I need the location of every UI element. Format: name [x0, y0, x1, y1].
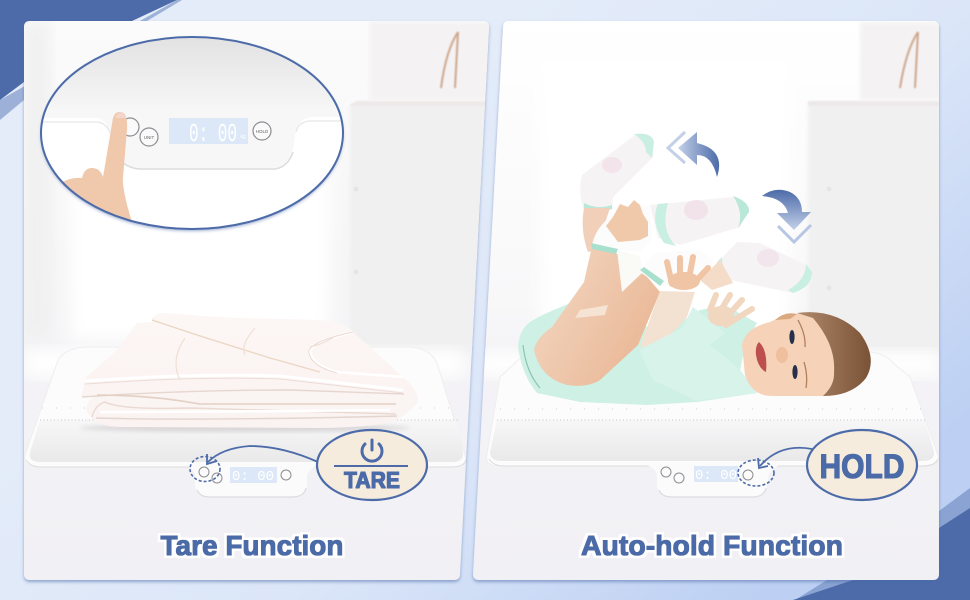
center sock [592, 220, 606, 244]
forearm (translucent) [640, 291, 695, 347]
ghost foot: middle [650, 196, 749, 246]
ghost foot: lower [717, 242, 812, 293]
leg [534, 246, 660, 386]
hold button highlight and arrow [738, 448, 812, 486]
scale display reading: kg [240, 134, 246, 140]
tare callout: TARE [344, 467, 400, 493]
arrow: kick down right [762, 190, 811, 242]
back skin toward lower foot [700, 260, 733, 290]
scale console [188, 466, 314, 498]
panel: tare function [24, 21, 489, 580]
hair [797, 312, 871, 396]
scale display reading [169, 118, 248, 144]
rear leg [583, 208, 610, 252]
magnified view: finger pressing tare button [40, 37, 345, 229]
head [742, 313, 869, 396]
tare button highlight and arrow [190, 446, 318, 482]
tare callout [317, 430, 427, 500]
heading: tare function: Tare Function [160, 530, 344, 561]
icon: power [362, 440, 382, 461]
arrow: kick up left [668, 132, 719, 177]
room furniture [473, 22, 945, 376]
scale console: 0: 00 [695, 468, 737, 484]
heading: auto-hold function: Auto-hold Function [581, 530, 843, 561]
onesie [518, 300, 757, 405]
hands [667, 257, 708, 284]
scale buttons [121, 118, 271, 146]
scale buttons: HOLD [256, 129, 269, 134]
panel: auto-hold function [473, 21, 939, 580]
second foot sock [642, 272, 648, 278]
panel scene: auto-hold room and scale [473, 22, 945, 561]
hold callout: HOLD [820, 448, 904, 486]
eyes [789, 330, 795, 344]
finger and hand [62, 112, 132, 224]
sleeve [639, 307, 757, 401]
baby scale platform [487, 351, 938, 466]
mouth and nose [756, 342, 766, 372]
scale console: 0: 00 [232, 469, 274, 485]
scale display reading: 0: 00 [189, 119, 237, 149]
baby [518, 134, 871, 405]
ghost foot: upper [580, 134, 654, 211]
baby scale platform [25, 347, 466, 467]
folded quilt [80, 313, 418, 432]
hold callout [807, 430, 917, 500]
scale console [642, 464, 782, 497]
room furniture [24, 21, 500, 376]
panel scene: tare function room and scale [24, 21, 500, 561]
scale buttons: UNIT [144, 135, 154, 140]
